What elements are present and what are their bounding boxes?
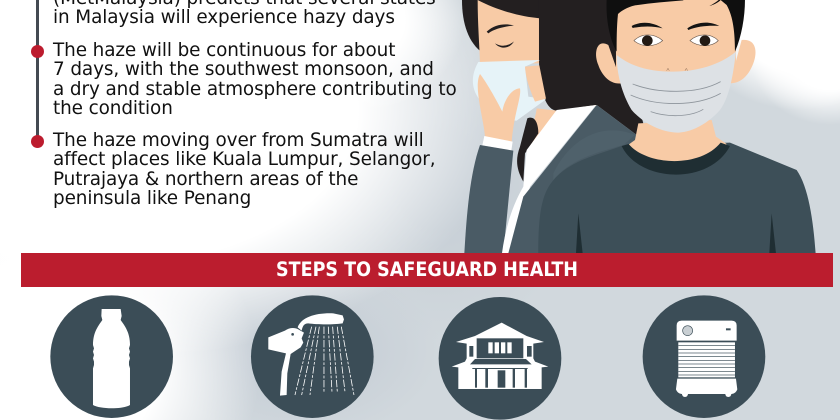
text block: haze duration: the condition [53, 98, 173, 119]
text block: MetMalaysia prediction: in Malaysia will experience hazy days [53, 7, 395, 28]
text block: affected places: The haze moving over from Sumatra will [53, 130, 424, 151]
text block: affected places: Putrajaya & northern areas of the [53, 169, 358, 190]
icon: water bottle [50, 295, 173, 418]
icon: shower [251, 295, 374, 418]
banner: steps to safeguard health [21, 253, 833, 287]
text block: haze duration [52, 40, 457, 119]
text block: haze duration: The haze will be continuous for about [53, 40, 395, 61]
text block: affected places: affect places like Kuala Lumpur, Selangor, [53, 149, 436, 170]
man [538, 0, 816, 253]
timeline line [36, 0, 39, 142]
text block: affected places [52, 130, 436, 209]
icon: air purifier [643, 295, 765, 418]
text block: affected places: peninsula like Penang [53, 188, 251, 209]
text block: haze duration: a dry and stable atmosphere contributing to [53, 79, 457, 100]
woman [462, 0, 643, 253]
bullet dot 2 [31, 135, 44, 148]
bullet dot 1 [31, 45, 44, 58]
banner: steps to safeguard health: STEPS TO SAFEGUARD HEALTH [276, 258, 578, 281]
text block: MetMalaysia prediction [53, 0, 436, 28]
text block: haze duration: 7 days, with the southwest monsoon, and [53, 59, 434, 80]
icon: house [439, 297, 561, 420]
